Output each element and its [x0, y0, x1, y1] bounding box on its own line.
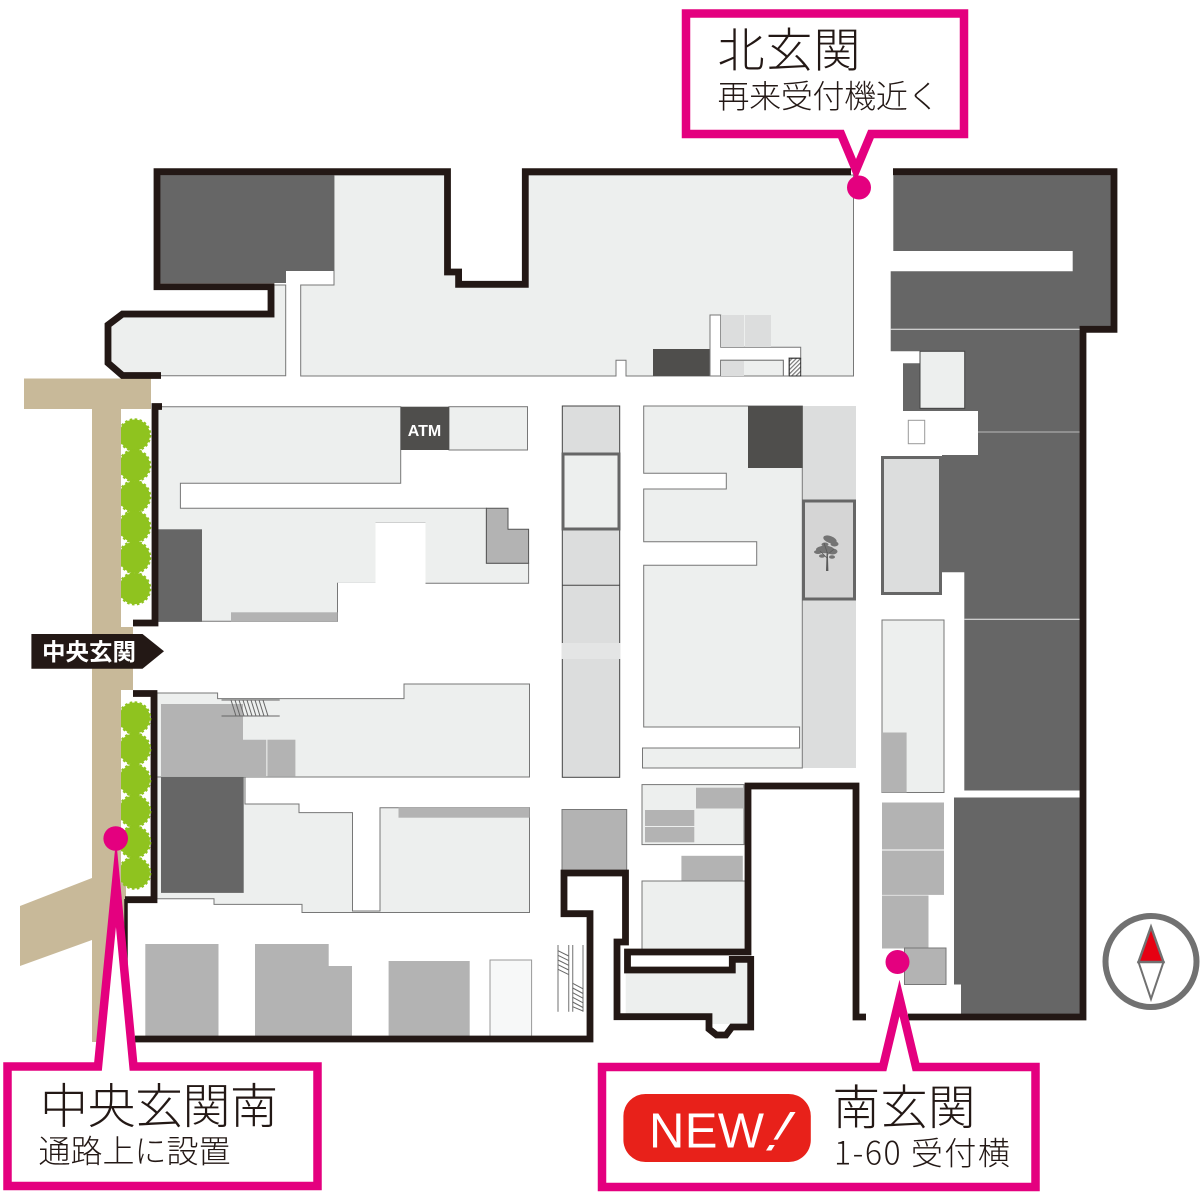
- upper light room: [642, 785, 744, 845]
- west upper block: [158, 407, 529, 622]
- callout note: 1-60 受付横: [834, 1128, 1010, 1174]
- south row gray rooms: [145, 944, 532, 1037]
- west upper gray strip: [231, 612, 338, 621]
- wing dividers: [891, 329, 1080, 619]
- north service corridor: [710, 315, 801, 376]
- callout: central entrance south: [8, 883, 318, 1186]
- white gap: [338, 523, 426, 585]
- callout note: 再来受付機近く: [718, 72, 940, 118]
- pin: central entrance south: [103, 826, 128, 851]
- northeast wall: [893, 172, 1114, 1017]
- exterior walls: [108, 172, 1114, 1039]
- north wall: [108, 172, 851, 376]
- north service dark room: [653, 349, 710, 376]
- south stairs: [558, 945, 583, 1012]
- west lower gray strip: [398, 808, 530, 818]
- wing light room: [920, 351, 965, 408]
- west lower gray room: [267, 740, 295, 776]
- ATM box: ATM: [408, 423, 441, 440]
- central column floor: [562, 406, 620, 777]
- central entrance arrow label: 中央玄関: [42, 633, 136, 667]
- gray room south of column: [562, 810, 627, 872]
- callout heading: 北玄関: [718, 12, 860, 81]
- northwest dark room: [160, 175, 334, 283]
- callout heading: 南玄関: [832, 1070, 976, 1138]
- room beside ATM: [449, 407, 528, 450]
- icon: tree: [814, 534, 838, 571]
- east gray rooms: [882, 732, 946, 984]
- north hall floor: [301, 175, 854, 376]
- new badge: NEW: [649, 1104, 765, 1158]
- compass needle north: [1138, 927, 1164, 962]
- central dark room: [748, 406, 803, 468]
- central block: [642, 406, 856, 768]
- north wing floor: [108, 285, 286, 376]
- outdoor walkway: [20, 378, 151, 1042]
- east column rooms: [882, 620, 946, 984]
- west lower lower floor: [157, 777, 530, 912]
- walkway edge over planting: [110, 409, 121, 890]
- stair lines: [222, 700, 280, 716]
- callout heading: 中央玄関南: [40, 1067, 278, 1137]
- new badge: !: [754, 1100, 808, 1162]
- callout note: 通路上に設置: [38, 1126, 230, 1172]
- north small room: [721, 360, 783, 376]
- east light room: [882, 620, 944, 792]
- callout: south entrance: [602, 998, 1036, 1187]
- wing small room: [908, 420, 925, 444]
- central entrance arrow label: [31, 633, 164, 669]
- tree box: [804, 501, 854, 599]
- west lower upper gray rooms: [161, 704, 266, 776]
- west lower upper floor: [157, 684, 530, 777]
- highlighted room: [563, 454, 619, 529]
- right gray strip: [803, 406, 856, 768]
- east dark wing: [882, 175, 1112, 1016]
- lower planting row: [119, 702, 150, 888]
- new badge: [623, 1094, 811, 1162]
- central column: [562, 406, 627, 872]
- ATM box: [401, 407, 449, 450]
- pin: south entrance: [886, 950, 910, 974]
- south annex floor: [626, 960, 748, 1024]
- west upper dark room: [158, 529, 202, 622]
- west wall thin part: [124, 899, 128, 1000]
- west upper floor: [158, 407, 529, 621]
- upper planting row: [119, 420, 150, 604]
- callout: north entrance: [686, 12, 964, 170]
- north building floor: [108, 175, 854, 376]
- west upper gray room: [486, 508, 529, 563]
- west lower block: [145, 684, 583, 1037]
- west wall lower: [125, 694, 154, 900]
- wing gray room: [882, 458, 940, 594]
- gray rooms: [645, 788, 744, 881]
- north gray rooms: [721, 315, 771, 347]
- southern center rooms: [626, 785, 748, 1024]
- central column gap: [562, 643, 620, 659]
- pin: north entrance: [847, 176, 871, 200]
- compass needle south: [1138, 962, 1164, 999]
- north hatched room: [789, 358, 801, 376]
- lower light room: [642, 881, 746, 951]
- wing divider: [978, 431, 1080, 433]
- west wall upper: [133, 406, 162, 623]
- compass: [1106, 916, 1196, 1007]
- divider: [562, 584, 620, 586]
- west lower dark room: [161, 777, 244, 893]
- central floor: [642, 406, 802, 768]
- south wall and annex: [135, 786, 866, 1039]
